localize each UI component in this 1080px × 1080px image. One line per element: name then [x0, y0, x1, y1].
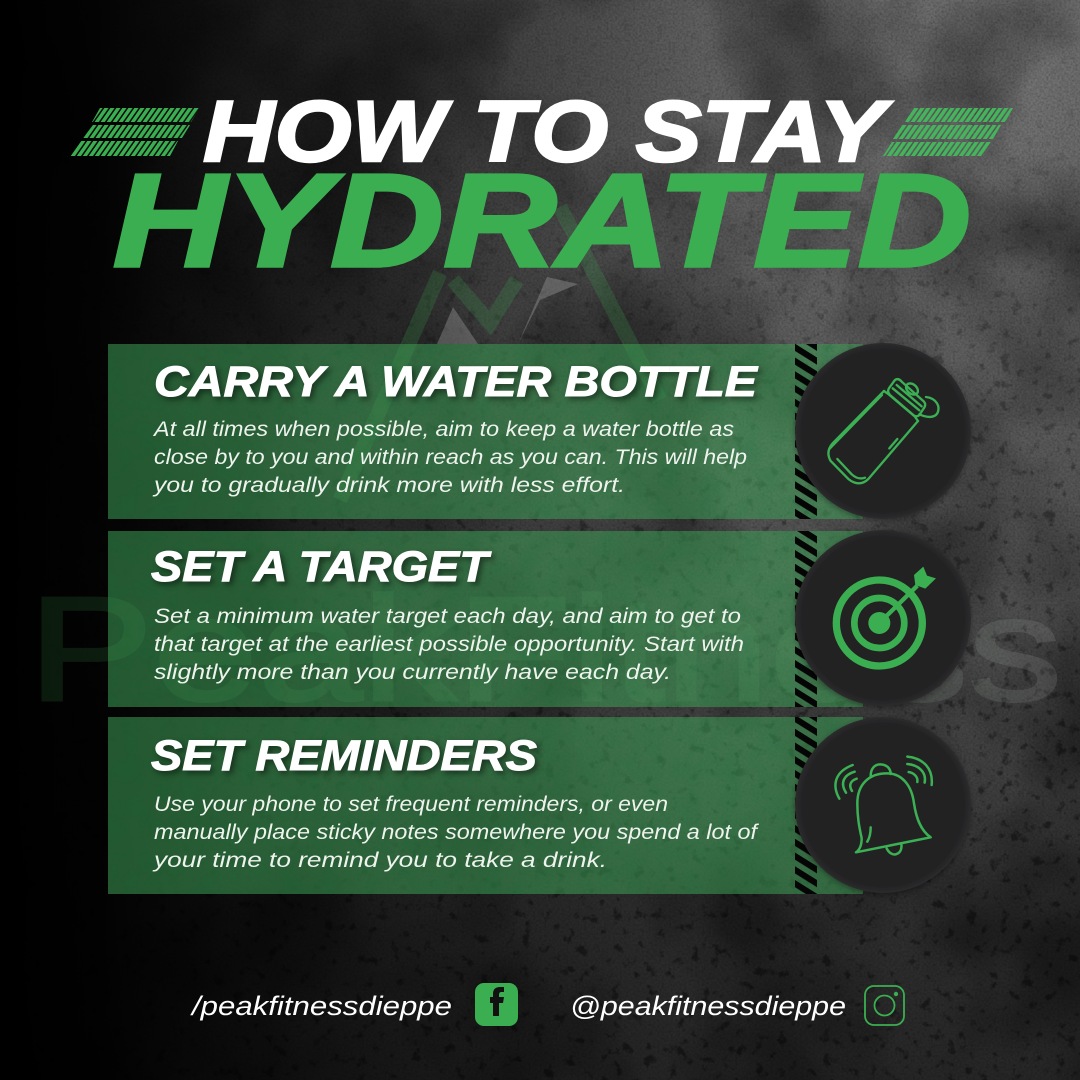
icon: water bottle — [828, 379, 938, 483]
right decorative speed stripes — [883, 108, 1013, 156]
icon: instagram — [865, 986, 904, 1025]
description: your time to remind you to take a drink. — [152, 849, 607, 872]
description: slightly more than you currently have each day. — [154, 661, 671, 684]
watermark: green mountain strokes — [340, 207, 660, 500]
panel background — [108, 344, 863, 519]
panel: carry a water bottle — [108, 343, 971, 519]
description: Set a minimum water target each day, and aim to get to — [154, 605, 741, 628]
panel background — [108, 717, 863, 894]
title line: hydrated: HYDRATED — [113, 147, 971, 294]
description: close by to you and within reach as you can. This will help — [154, 446, 747, 469]
instagram handle: @peakfitnessdieppe — [570, 991, 846, 1021]
heading: SET REMINDERS — [151, 732, 537, 780]
icon disc — [795, 343, 971, 519]
facebook handle: /peakfitnessdieppe — [190, 991, 452, 1021]
title — [113, 84, 971, 294]
left decorative speed stripes — [70, 108, 200, 156]
icon: facebook — [475, 983, 518, 1026]
watermark: gray peaks — [437, 277, 578, 344]
description — [154, 605, 744, 684]
description: that target at the earliest possible opportunity. Start with — [154, 633, 744, 656]
description — [152, 793, 759, 872]
heading: SET A TARGET — [151, 543, 492, 591]
heading: CARRY A WATER BOTTLE — [154, 358, 758, 406]
description: At all times when possible, aim to keep a water bottle as — [152, 418, 735, 441]
icon: ringing bell — [835, 757, 932, 854]
title line: how to stay: HOW TO STAY — [203, 84, 893, 180]
watermark logo — [28, 207, 1062, 732]
hatch strip — [795, 531, 817, 707]
description: Use your phone to set frequent reminders, or even — [154, 793, 668, 816]
panel: set reminders — [108, 717, 971, 894]
icon disc — [795, 717, 971, 893]
description — [152, 418, 747, 497]
hatch strip — [795, 717, 817, 894]
icon: target with arrow — [836, 567, 936, 666]
description: manually place sticky notes somewhere you spend a lot of — [154, 821, 759, 844]
hatch strip — [795, 344, 817, 519]
icon disc — [795, 530, 971, 706]
watermark: brand name: PeakFitness — [28, 567, 1062, 732]
footer: social handles — [190, 983, 904, 1026]
panel: set a target — [108, 530, 971, 707]
description: you to gradually drink more with less effort. — [152, 474, 625, 497]
panel background — [108, 531, 863, 707]
